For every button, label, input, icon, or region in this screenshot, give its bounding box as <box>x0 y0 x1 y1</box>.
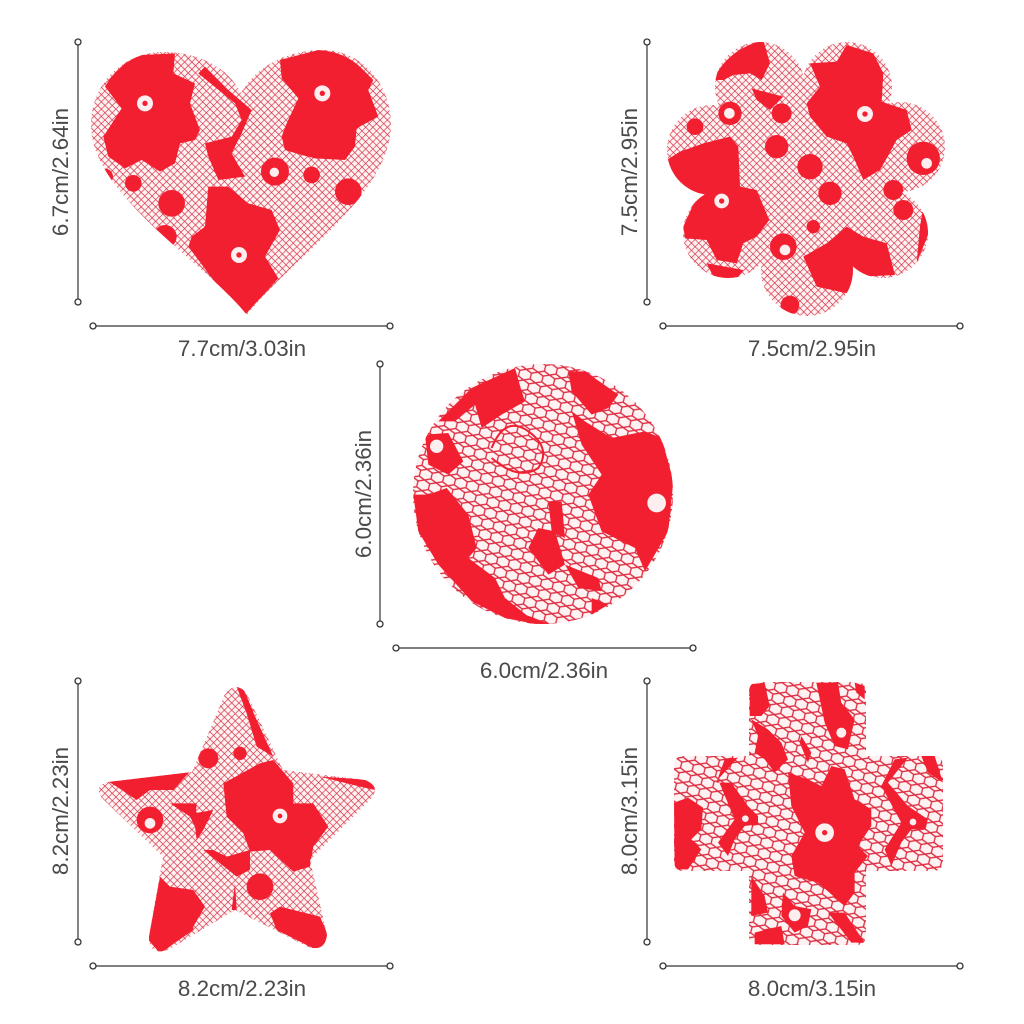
star width label: 8.2cm/2.23in <box>178 976 306 1001</box>
star height dimension <box>75 678 81 945</box>
circle height label: 6.0cm/2.36in <box>351 430 376 558</box>
cross height dimension <box>644 678 650 945</box>
heart width label: 7.7cm/3.03in <box>178 336 306 361</box>
heart lace shape <box>85 45 397 320</box>
circle width dimension <box>393 645 696 651</box>
circle width label: 6.0cm/2.36in <box>480 658 608 683</box>
circle height dimension <box>377 361 383 627</box>
heart width dimension <box>90 323 393 329</box>
star height label: 8.2cm/2.23in <box>48 747 73 875</box>
flower height label: 7.5cm/2.95in <box>617 108 642 236</box>
flower width dimension <box>660 323 963 329</box>
star lace shape <box>98 687 375 952</box>
cross lace shape <box>670 678 948 950</box>
star width dimension <box>90 963 393 969</box>
flower lace shape <box>660 38 950 320</box>
heart height label: 6.7cm/2.64in <box>48 108 73 236</box>
heart height dimension <box>75 39 81 305</box>
cross height label: 8.0cm/3.15in <box>617 747 642 875</box>
cross width label: 8.0cm/3.15in <box>748 976 876 1001</box>
flower width label: 7.5cm/2.95in <box>748 336 876 361</box>
cross width dimension <box>660 963 963 969</box>
flower height dimension <box>644 39 650 305</box>
circle lace shape <box>410 360 676 628</box>
